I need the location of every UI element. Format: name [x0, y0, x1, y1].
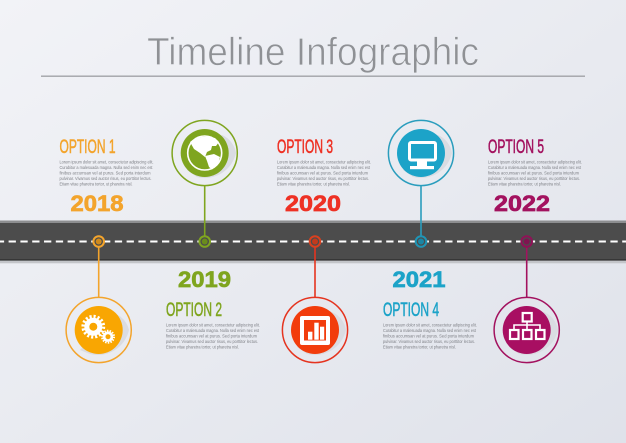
road marker 2020	[310, 236, 320, 247]
year 2020: 2020	[285, 191, 341, 216]
description 3: Curabitur a malesuada magna. Nulla sed enim nec est	[277, 165, 371, 171]
road	[0, 220, 626, 263]
description 1: pulvinar. Vivamus sed auctor risus, eu porttitor lectus.	[60, 176, 152, 182]
description 4: Etiam vitae pharetra tortor, ut pharetra nisl.	[383, 344, 456, 350]
continents	[190, 136, 219, 157]
description 2: Curabitur a malesuada magna. Nulla sed enim nec est	[166, 328, 260, 334]
description 5: Etiam vitae pharetra tortor, ut pharetra nisl.	[488, 182, 561, 188]
milestone 2022	[488, 137, 582, 363]
milestone 2019	[166, 120, 260, 351]
description 5: Lorem ipsum dolor sit amet, consectetur adipiscing elit.	[488, 160, 582, 166]
icon: monitor in circle	[388, 120, 454, 186]
year 2018: 2018	[70, 191, 124, 216]
icon: bar chart in circle	[282, 297, 348, 363]
option heading 5: OPTION 5	[488, 137, 544, 158]
option heading 4: OPTION 4	[383, 300, 439, 321]
description 4	[383, 322, 477, 350]
title: Timeline Infographic	[147, 31, 479, 74]
road marker 2019	[199, 236, 210, 247]
connector 2022	[526, 247, 528, 297]
description 1: Lorem ipsum dolor sit amet, consectetur adipiscing elit.	[60, 160, 154, 166]
year 2019: 2019	[178, 267, 231, 292]
connector 2020	[314, 247, 316, 297]
description 3	[277, 160, 371, 188]
gear large	[83, 316, 104, 337]
connector 2019	[204, 186, 206, 236]
description 5	[488, 160, 582, 188]
year 2022: 2022	[494, 191, 550, 216]
title underline	[41, 76, 585, 77]
road marker 2018	[93, 236, 104, 247]
description 2: Etiam vitae pharetra tortor, ut pharetra nisl.	[166, 344, 239, 350]
description 5: pulvinar. Vivamus sed auctor risus, eu porttitor lectus.	[488, 176, 580, 182]
milestone 2018	[60, 137, 154, 363]
description 3: Lorem ipsum dolor sit amet, consectetur adipiscing elit.	[277, 160, 371, 166]
connector 2018	[98, 247, 100, 297]
description 3: Etiam vitae pharetra tortor, ut pharetra nisl.	[277, 182, 350, 188]
description 5: finibus accumsan vel at purus. Sed porta interdum	[488, 170, 579, 176]
option heading 2: OPTION 2	[166, 300, 222, 321]
icon: gears in circle	[66, 297, 131, 363]
option heading 1: OPTION 1	[60, 137, 116, 158]
description 4: finibus accumsan vel at purus. Sed porta interdum	[383, 334, 474, 340]
road marker 2021	[416, 236, 426, 247]
road centre dashes	[0, 240, 626, 242]
milestone 2021	[383, 120, 477, 351]
icon: globe in circle	[172, 120, 237, 186]
description 2: pulvinar. Vivamus sed auctor risus, eu porttitor lectus.	[166, 339, 258, 345]
description 1: Etiam vitae pharetra tortor, ut pharetra nisl.	[60, 182, 132, 188]
description 4: pulvinar. Vivamus sed auctor risus, eu porttitor lectus.	[383, 339, 475, 345]
description 3: pulvinar. Vivamus sed auctor risus, eu porttitor lectus.	[277, 176, 369, 182]
description 2	[166, 322, 260, 350]
road marker 2022	[521, 236, 532, 247]
description 4: Curabitur a malesuada magna. Nulla sed enim nec est	[383, 328, 477, 334]
year 2021: 2021	[392, 267, 446, 292]
description 2: finibus accumsan vel at purus. Sed porta interdum	[166, 334, 257, 340]
option heading 3: OPTION 3	[277, 137, 333, 158]
description 1: finibus accumsan vel at purus. Sed porta interdum	[60, 170, 150, 176]
gear small	[102, 331, 114, 343]
description 1	[60, 160, 154, 188]
milestone 2020	[277, 137, 371, 363]
description 1: Curabitur a malesuada magna. Nulla sed enim nec est	[60, 165, 153, 171]
description 4: Lorem ipsum dolor sit amet, consectetur adipiscing elit.	[383, 322, 477, 328]
connector 2021	[420, 186, 422, 236]
description 2: Lorem ipsum dolor sit amet, consectetur adipiscing elit.	[166, 322, 260, 328]
icon: org chart in circle	[494, 297, 559, 363]
description 3: finibus accumsan vel at purus. Sed porta interdum	[277, 170, 368, 176]
description 5: Curabitur a malesuada magna. Nulla sed enim nec est	[488, 165, 582, 171]
